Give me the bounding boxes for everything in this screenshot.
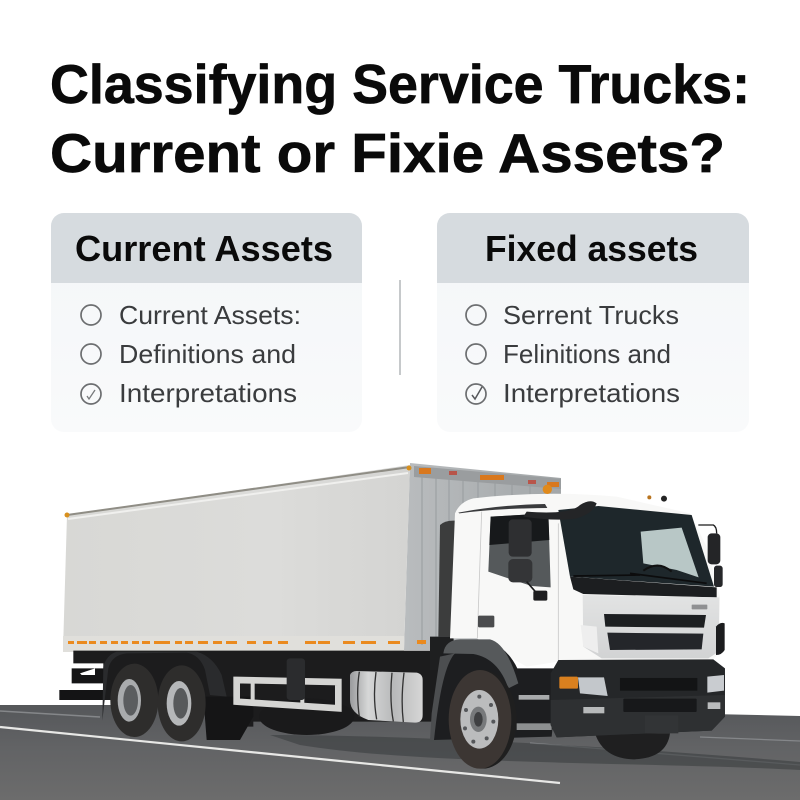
front face and grille <box>581 595 725 658</box>
title: Current or Fixie Assets? <box>50 122 725 184</box>
side reflector strip <box>68 640 426 644</box>
list: fixed assets items: Serrent Trucks <box>503 300 679 330</box>
list: current assets items: Definitions and <box>119 339 296 369</box>
list: fixed assets items: Felinitions and <box>503 339 671 369</box>
panel: current assets <box>51 213 362 432</box>
front bumper <box>551 659 725 737</box>
panel heading: fixed assets: Fixed assets <box>485 228 698 269</box>
panel heading: current assets <box>51 213 362 283</box>
panel heading: current assets: Current Assets <box>75 228 333 269</box>
door handle <box>478 616 494 627</box>
list: fixed assets items <box>466 300 680 408</box>
spare tyre strip <box>438 521 456 637</box>
front right wheel <box>595 733 670 759</box>
side window <box>488 513 551 587</box>
panel: fixed assets <box>437 213 749 432</box>
windshield <box>558 506 717 597</box>
roof marker lamps <box>543 485 552 494</box>
list: current assets items: Current Assets: <box>119 300 301 330</box>
rear wheel one <box>110 664 158 737</box>
wheel arch and step <box>430 639 558 740</box>
list: current assets items <box>81 300 301 408</box>
title <box>50 53 750 184</box>
side guard <box>237 680 338 708</box>
list: fixed assets items: Interpretations <box>503 378 680 408</box>
chassis and rear wheels <box>59 651 443 741</box>
truck <box>59 463 725 769</box>
front wheel <box>449 670 517 769</box>
road <box>0 705 800 800</box>
panel heading: fixed assets <box>437 213 749 283</box>
mirrors <box>508 501 723 601</box>
cargo box side <box>63 465 426 652</box>
cab shell <box>450 494 720 667</box>
list: current assets items: Interpretations <box>119 378 297 408</box>
title: Classifying Service Trucks: <box>50 53 750 115</box>
cab and front wheels <box>430 485 725 769</box>
fuel tank <box>350 671 423 723</box>
rear wheel two <box>158 665 206 741</box>
cargo box rear/front face <box>404 463 561 650</box>
